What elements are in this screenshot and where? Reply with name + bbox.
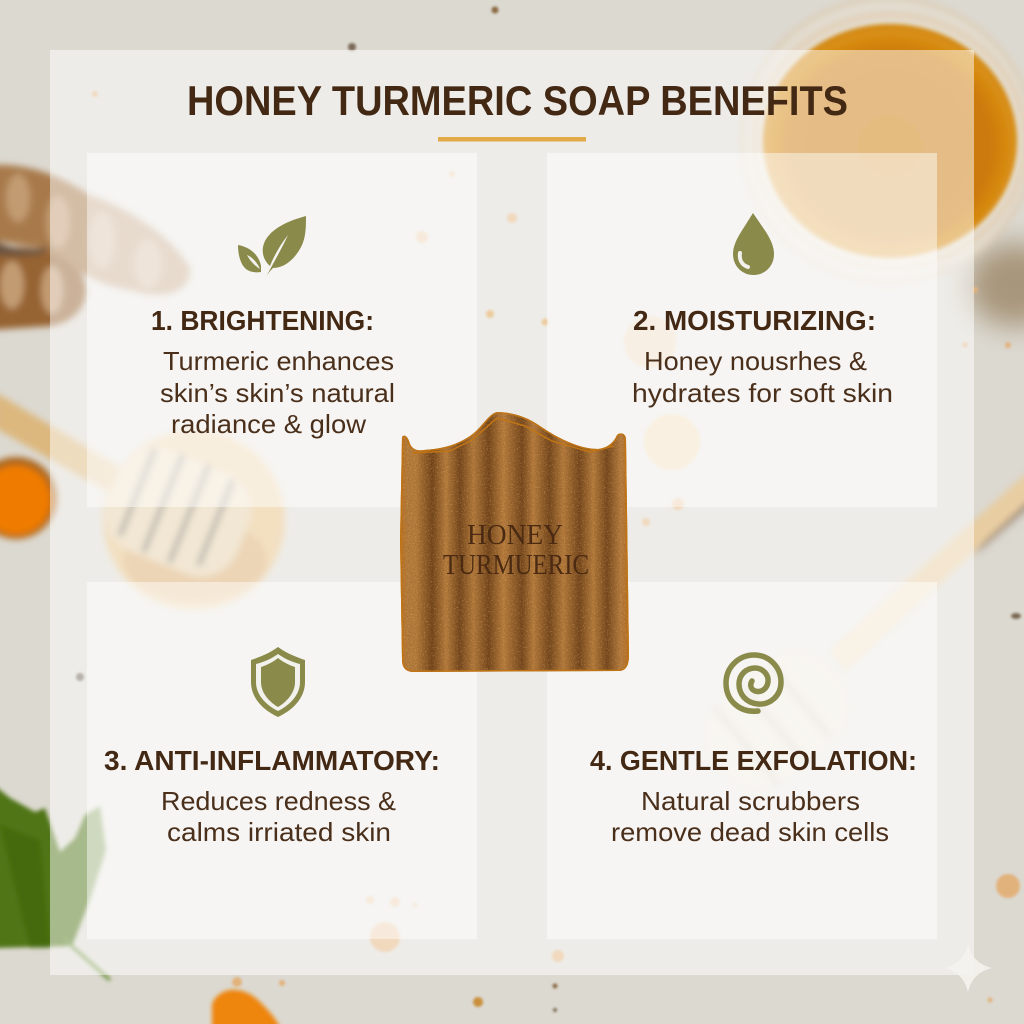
panel: brightening card background [87, 153, 477, 507]
honey bowl [742, 0, 1024, 327]
heading: anti-inflammatory: 3. ANTI-INFLAMMATORY: [104, 745, 440, 776]
turmeric roots [0, 165, 190, 330]
panel: exfoliation card background [547, 582, 937, 939]
title: HONEY TURMERIC SOAP BENEFITS [187, 77, 848, 124]
text: moisturizing description: hydrates for soft skin [632, 378, 893, 408]
text: moisturizing description [632, 346, 893, 408]
icon: shield [251, 647, 305, 717]
heading: brightening: 1. BRIGHTENING: [151, 305, 374, 336]
soap embossed text: HONEY [467, 520, 563, 551]
icon: water drop [733, 213, 774, 275]
heading: gentle exfoliation: 4. GENTLE EXFOLATION: [590, 745, 917, 776]
honey dipper right [689, 470, 1024, 805]
title underline [438, 137, 586, 142]
text: anti-inflammatory description: calms irriated skin [167, 817, 391, 847]
text: brightening description: skin’s skin’s natural [160, 378, 395, 408]
heading: moisturizing: 2. MOISTURIZING: [633, 305, 876, 336]
text: moisturizing description: Honey nousrhes & [644, 346, 867, 376]
icon: leaves [238, 216, 306, 277]
text: anti-inflammatory description [161, 786, 396, 847]
text: brightening description [160, 346, 395, 439]
soap embossed text [443, 520, 589, 581]
turmeric slice bottom [212, 990, 280, 1024]
green leaf [0, 786, 110, 980]
panel: anti-inflammatory card background [87, 582, 477, 939]
text: exfoliation description [611, 786, 889, 847]
text: anti-inflammatory description: Reduces redness & [161, 786, 396, 816]
text: brightening description: radiance & glow [171, 409, 366, 439]
soap embossed text: TURMUERIC [443, 550, 589, 581]
honey dipper left with turmeric slice [0, 392, 285, 610]
icon: sparkle [944, 944, 992, 992]
text: brightening description: Turmeric enhances [163, 346, 394, 376]
soap bar [398, 408, 632, 674]
text: exfoliation description: Natural scrubbers [641, 786, 860, 816]
text: exfoliation description: remove dead skin cells [611, 817, 889, 847]
icon: spiral [726, 655, 781, 711]
panel: moisturizing card background [547, 153, 937, 507]
